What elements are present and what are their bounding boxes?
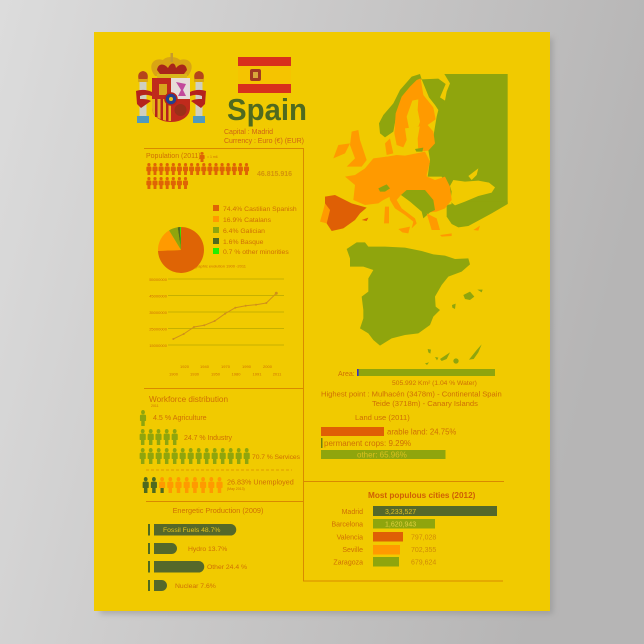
- agriculture row: 4.5 % Agriculture: [153, 414, 207, 422]
- bar: hydro: Hydro 13.7%: [188, 546, 227, 553]
- x axis labels: 1930: [190, 372, 200, 376]
- x axis labels: 1990: [242, 364, 252, 369]
- bar: Madrid: [342, 506, 497, 516]
- unemployed row: 26.83% Unemployed: [227, 478, 294, 486]
- capital and currency: [224, 129, 304, 145]
- title: Spain: [227, 92, 307, 127]
- x axis labels: 2000: [263, 364, 273, 369]
- population total: 46.815.916: [257, 171, 292, 178]
- unemployed row: [143, 477, 294, 493]
- y axis labels: 45000000: [149, 294, 168, 298]
- shield: [152, 78, 190, 122]
- Turkey: [447, 202, 508, 227]
- bar: nuclear: Nuclear 7.6%: [175, 583, 216, 590]
- y axis labels: [149, 277, 168, 348]
- bar: fossil fuels: Fossil Fuels 48.7%: [163, 527, 220, 534]
- bar: Madrid: Madrid: [342, 509, 363, 516]
- panel: most populous cities: [331, 491, 497, 566]
- Greece: [427, 213, 440, 230]
- icon: flag of Spain: [238, 57, 291, 93]
- panel frame lines: [144, 148, 504, 581]
- population line: [173, 293, 276, 339]
- Balkans: [401, 190, 435, 218]
- Gulf of Bothnia: [407, 99, 420, 128]
- bar: Seville: Seville: [342, 547, 363, 554]
- bar: permanent crops: permanent crops: 9.29%: [324, 439, 411, 448]
- France: [345, 157, 390, 205]
- highest point text: [321, 390, 502, 408]
- x axis labels: [169, 364, 282, 376]
- panel: population: [146, 152, 292, 189]
- bar: Zaragoza: Zaragoza: [333, 560, 363, 566]
- heading: population: Population (2011): [146, 153, 201, 160]
- unemployed row: (May 2013): [227, 487, 245, 491]
- bar: Barcelona: [331, 519, 435, 528]
- Spain highlight: [325, 195, 367, 231]
- bar: Valencia: 797,028: [411, 534, 436, 542]
- central and southern map: [320, 130, 508, 237]
- heading: cities: Most populous cities (2012): [368, 491, 476, 500]
- population pictogram: [146, 163, 249, 189]
- Sea of Azov: [468, 168, 478, 180]
- x axis labels: 1970: [221, 364, 231, 369]
- x axis labels: 1950: [211, 372, 221, 376]
- Sweden and Finland: [394, 78, 436, 147]
- Denmark: [385, 138, 393, 155]
- bar: Zaragoza: [333, 557, 436, 566]
- icon: coat of arms: [136, 53, 206, 123]
- panel: energetic production: [148, 506, 263, 591]
- panel: workforce distribution: [140, 395, 301, 493]
- Balearic: [362, 218, 368, 221]
- Kaliningrad: [415, 148, 423, 152]
- heading: workforce: Workforce distribution: [149, 395, 228, 404]
- industry row: [140, 429, 232, 445]
- chart heading: demographic evolution: Demographic evolution 1900 -2011: [184, 264, 247, 268]
- legend: languages: 74.4% Castilian Spanish: [223, 206, 297, 213]
- x axis labels: 2011: [273, 372, 282, 376]
- crown: [151, 53, 192, 78]
- services row: [140, 448, 301, 464]
- bar: Madrid: 3,233,527: [385, 509, 416, 516]
- agriculture row: [140, 410, 207, 426]
- workforce year: 2011: [151, 404, 159, 408]
- panel: land use: [321, 413, 456, 460]
- x axis labels: 1940: [200, 364, 210, 369]
- Baltic states: [418, 125, 435, 152]
- mainland: [347, 242, 470, 346]
- Balearic islands: [452, 290, 483, 309]
- legend: languages: [213, 205, 297, 256]
- poster panel: [94, 32, 550, 611]
- highest point text: Teide (3718m) - Canary Islands: [372, 399, 478, 408]
- line chart: population evolution: [149, 277, 284, 376]
- Germany and Poland: [385, 152, 430, 195]
- bar: Seville: 702,355: [411, 547, 436, 554]
- bar: Valencia: Valencia: [337, 534, 363, 542]
- y axis labels: 25000000: [149, 326, 168, 332]
- Ireland: [333, 143, 350, 158]
- map: Spain: [347, 242, 483, 365]
- legend: languages: 0.7 % other minorities: [223, 249, 289, 256]
- area figure: 505.992 Km² (1.04 % Water): [392, 380, 477, 387]
- Black Sea: [450, 180, 495, 205]
- y axis labels: 15000000: [149, 343, 168, 348]
- x axis labels: 1900: [169, 372, 179, 376]
- right pillar: [190, 71, 206, 123]
- bar: other: Other 24.4 %: [207, 564, 247, 571]
- bar: Barcelona: 1,620,943: [385, 522, 416, 528]
- bar: Barcelona: Barcelona: [331, 522, 363, 528]
- legend: languages: 16.9% Catalans: [223, 217, 272, 224]
- Switzerland: [378, 184, 390, 192]
- pie chart: languages: [158, 227, 204, 273]
- bar: Valencia: [337, 532, 436, 542]
- area bar: [338, 369, 495, 378]
- x axis labels: 1920: [180, 364, 190, 369]
- divider dashed: [146, 469, 292, 471]
- map: Europe: [320, 74, 508, 237]
- bar: Seville: [342, 545, 436, 554]
- icon: person key: [199, 152, 218, 162]
- icon: person key: = 1 mil.: [207, 155, 218, 159]
- Great Britain: [347, 130, 367, 167]
- area bar: Area:: [338, 371, 355, 378]
- x axis labels: 1991: [253, 372, 262, 376]
- heading: land use: Land use (2011): [355, 413, 410, 422]
- left pillar: [136, 71, 152, 123]
- Russia and Ukraine: [422, 74, 508, 204]
- industry row: 24.7 % Industry: [184, 435, 232, 442]
- services row: 70.7 % Services: [252, 454, 301, 461]
- Norway: [379, 74, 422, 137]
- capital and currency: Currency : Euro (€) (EUR): [224, 138, 304, 145]
- y axis labels: 55000000: [149, 277, 168, 282]
- legend: languages: 1.6% Basque: [223, 239, 264, 246]
- capital and currency: Capital : Madrid: [224, 129, 273, 136]
- bar: Zaragoza: 679,624: [411, 560, 436, 566]
- Portugal: [320, 203, 330, 223]
- northern and eastern map: [379, 74, 508, 204]
- highest point text: Highest point : Mulhacén (3478m) - Continental Spain: [321, 390, 502, 398]
- legend: languages: 6.4% Galician: [223, 228, 265, 235]
- bar: other: other: 65.96%: [357, 450, 407, 460]
- bar: arable land: arable land: 24.75%: [387, 428, 456, 436]
- heading: energy: Energetic Production (2009): [173, 506, 263, 515]
- Mediterranean islands: [384, 207, 480, 237]
- Romania and Hungary: [415, 175, 452, 212]
- Canary islands: [425, 344, 482, 365]
- x axis labels: 1980: [232, 372, 241, 376]
- Italy: [389, 193, 417, 228]
- y axis labels: 35000000: [149, 310, 168, 315]
